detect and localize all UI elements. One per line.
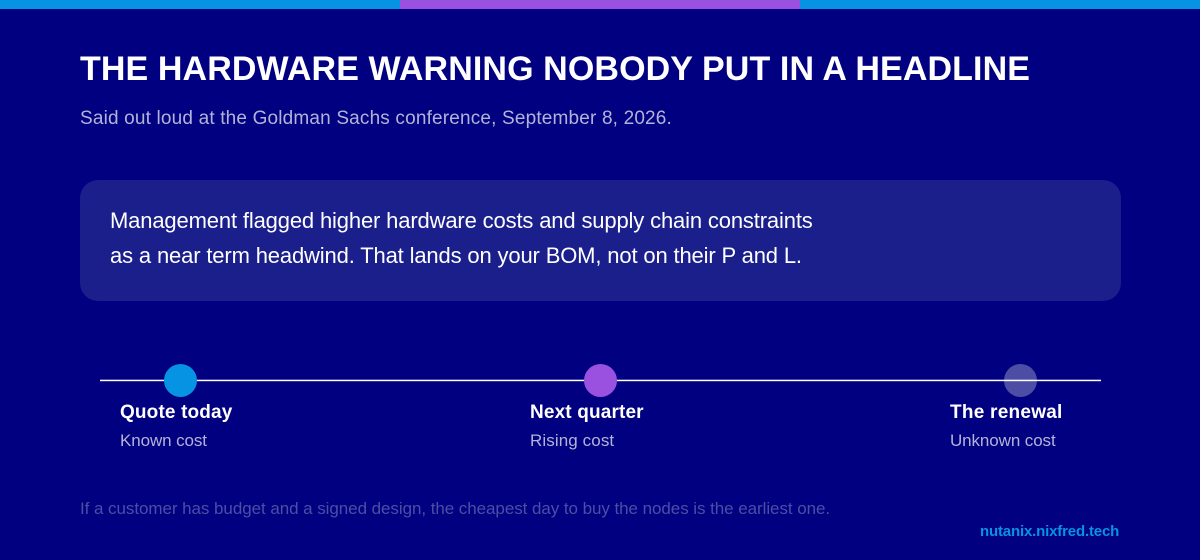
top colour bar (0, 0, 1200, 9)
milestone: next quarter (530, 364, 644, 450)
callout text: as a near term headwind. That lands on your BOM, not on their P and L. (110, 243, 802, 268)
source url: nutanix.nixfred.tech (980, 523, 1119, 540)
timeline: Quote today (120, 402, 232, 423)
timeline: Unknown cost (950, 431, 1056, 450)
timeline: Rising cost (530, 431, 614, 450)
footnote: If a customer has budget and a signed design, the cheapest day to buy the nodes is the earliest one. (80, 499, 830, 518)
timeline: Next quarter (530, 402, 644, 423)
timeline: The renewal (950, 402, 1063, 423)
panel: hardware cost callout (80, 180, 1121, 301)
title: THE HARDWARE WARNING NOBODY PUT IN A HEADLINE (80, 50, 1030, 88)
milestone: the renewal (950, 364, 1063, 450)
timeline (100, 364, 1101, 450)
callout text: Management flagged higher hardware costs and supply chain constraints (110, 208, 813, 233)
timeline: Known cost (120, 431, 207, 450)
milestone: quote today (120, 364, 232, 450)
subtitle: Said out loud at the Goldman Sachs conference, September 8, 2026. (80, 108, 672, 129)
callout text (110, 208, 813, 268)
